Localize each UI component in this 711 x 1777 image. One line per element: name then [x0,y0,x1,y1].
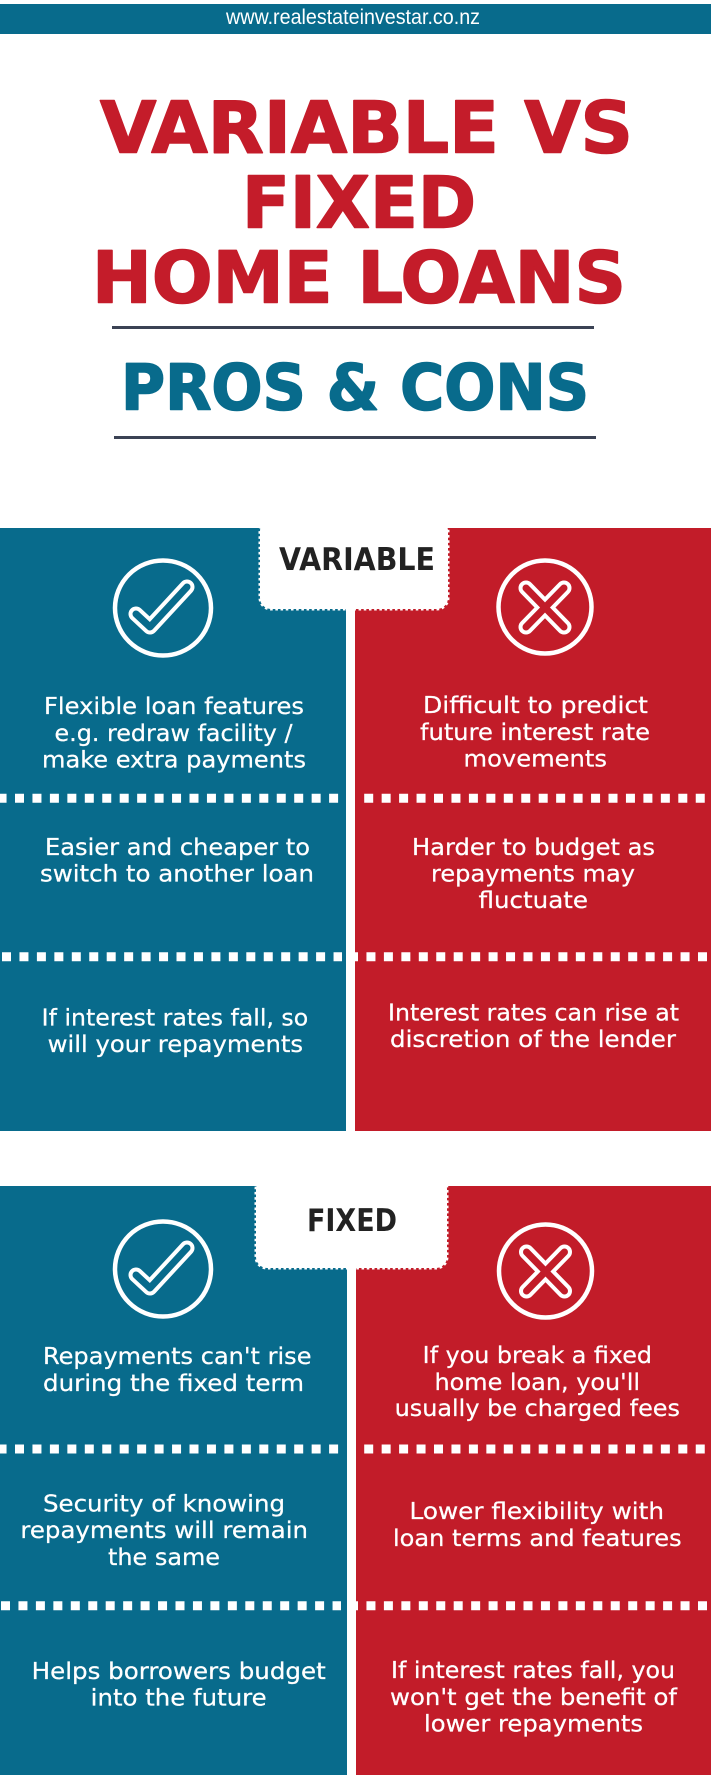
title: FIXED [242,162,476,244]
text: flexible loan features: e.g. redraw facility / [54,721,293,747]
text: harder to budget: Harder to budget as [412,835,655,861]
text: difficult to predict: Difficult to predict [423,693,648,719]
panel: variable pros [0,528,346,1131]
text: difficult to predict: movements [464,747,607,773]
tab: variable label: VARIABLE [279,542,435,578]
text: repayments can't rise: during the fixed term [43,1371,304,1397]
text: easier and cheaper: switch to another loan [40,862,314,888]
text: if interest rates fall: will your repayments [48,1032,303,1058]
text: repayments can't rise: Repayments can't rise [43,1344,312,1370]
text: if you break a fixed loan: usually be charged fees [395,1396,680,1422]
text: helps borrowers budget: into the future [91,1686,267,1712]
tab: fixed label [256,1178,447,1268]
text: interest rates can rise: discretion of the lender [390,1027,677,1053]
text: difficult to predict: future interest rate [420,720,650,746]
text: if you break a fixed loan [395,1343,680,1422]
text: flexible loan features: make extra payments [42,748,306,774]
text: security of knowing: the same [108,1545,220,1571]
text: if you break a fixed loan: If you break a fixed [423,1343,652,1369]
icon: cross mark [499,1224,592,1318]
text: difficult to predict [420,693,650,773]
text: no benefit of lower repayments [390,1658,678,1738]
text: harder to budget: fluctuate [478,888,588,914]
panel: fixed cons [356,1186,711,1775]
text: flexible loan features [42,694,306,774]
section: fixed [0,1178,711,1775]
text: if interest rates fall [42,1006,308,1058]
text: lower flexibility [393,1499,682,1552]
text: repayments can't rise [43,1344,312,1397]
panel: variable cons [355,528,711,1131]
text: interest rates can rise [388,1001,679,1053]
title [92,86,633,320]
icon: cross mark [498,560,592,654]
icon: check mark [115,560,211,656]
title: VARIABLE VS [100,86,633,170]
header bar with website [0,4,711,34]
subtitle: PROS & CONS [121,352,589,424]
text: lower flexibility: loan terms and features [393,1526,682,1552]
tab: fixed label: FIXED [307,1203,397,1239]
tab: variable label [260,520,448,609]
text: no benefit of lower repayments: won't get the benefit of [390,1685,678,1711]
text: flexible loan features: Flexible loan features [44,694,304,720]
text: if you break a fixed loan: home loan, you'll [434,1370,640,1396]
section: variable [0,520,711,1131]
text: security of knowing: Security of knowing [43,1492,285,1518]
text: easier and cheaper: Easier and cheaper to [45,835,310,861]
text: lower flexibility: Lower flexibility with [410,1499,664,1525]
text: helps borrowers budget: Helps borrowers budget [32,1659,326,1685]
text: no benefit of lower repayments: If interest rates fall, you [391,1658,675,1684]
text: helps borrowers budget [32,1659,326,1712]
text: security of knowing: repayments will remain [20,1518,308,1544]
text: interest rates can rise: Interest rates can rise at [388,1001,679,1027]
text: easier and cheaper [40,835,314,888]
panel: fixed pros [0,1186,347,1775]
text: no benefit of lower repayments: lower repayments [424,1712,643,1738]
title: HOME LOANS [92,236,626,320]
icon: check mark [115,1222,211,1316]
text: harder to budget [412,835,655,914]
text: if interest rates fall: If interest rates fall, so [42,1006,308,1032]
text: harder to budget: repayments may [431,862,635,888]
text: security of knowing [20,1492,308,1571]
header bar with website: www.realestateinvestar.co.nz [225,6,480,29]
